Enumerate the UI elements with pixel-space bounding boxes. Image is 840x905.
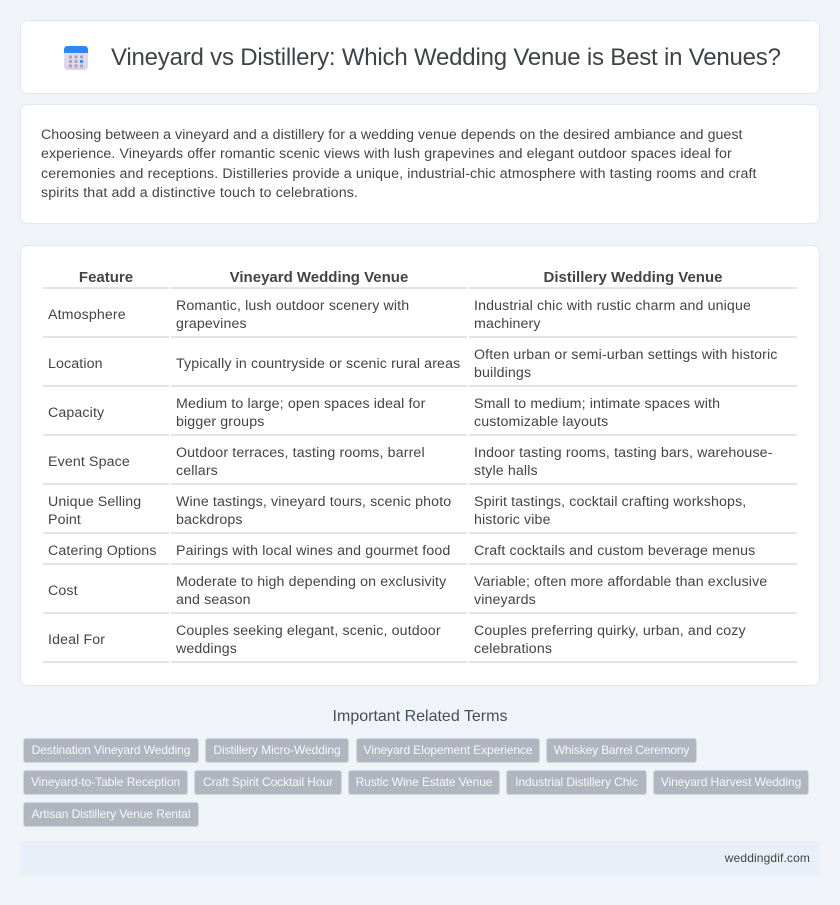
row: event space: Indoor tasting rooms, tasting bars, warehouse- [474,445,773,461]
chip: Distillery Micro-Wedding [213,743,341,757]
row: ideal for [43,623,797,663]
related terms chips [23,738,809,827]
row: catering options: Craft cocktails and custom beverage menus [474,543,755,559]
row: unique selling point: Unique Selling [48,494,141,510]
row: capacity: Small to medium; intimate spaces with [474,396,720,412]
chip: Industrial Distillery Chic [515,775,638,789]
row: atmosphere: grapevines [176,316,247,332]
footer source: weddingdif.com [725,851,810,865]
row: ideal for: celebrations [474,641,552,657]
row: unique selling point [43,494,797,534]
chip: Whiskey Barrel Ceremony [554,743,689,757]
chip [348,770,500,795]
row: cost [43,574,797,614]
chip: Vineyard Harvest Wedding [661,775,801,789]
row: cost: and season [176,592,251,608]
chip [23,738,199,763]
row: capacity [43,396,797,436]
row: event space: cellars [176,463,218,479]
row: atmosphere: machinery [474,316,541,332]
row: capacity: Medium to large; open spaces ideal for [176,396,425,412]
table header: Feature [79,269,133,286]
row: catering options: Catering Options [48,543,157,559]
row: unique selling point: Point [48,512,81,528]
row: location: Often urban or semi-urban settings with historic [474,347,778,363]
intro paragraph: ceremonies and receptions. Distilleries provide a unique, industrial-chic atmosphere with tasting rooms and craft [41,166,757,182]
row: catering options: Pairings with local wines and gourmet food [176,543,450,559]
chip [546,738,697,763]
chip [356,738,540,763]
row: unique selling point: Spirit tastings, cocktail crafting workshops, [474,494,746,510]
intro paragraph [41,127,757,201]
row: catering options [43,543,797,565]
row: event space: Event Space [48,454,130,470]
chip: Vineyard-to-Table Reception [31,775,180,789]
row: ideal for: Ideal For [48,632,105,648]
row: ideal for: Couples preferring quirky, urban, and cozy [474,623,746,639]
table header: Vineyard Wedding Venue [230,269,408,286]
row: location: Location [48,356,103,372]
chip [205,738,349,763]
comparison table card [20,245,820,686]
row: ideal for: Couples seeking elegant, scenic, outdoor [176,623,441,639]
row: location: Typically in countryside or scenic rural areas [176,356,460,372]
chip [653,770,809,795]
chip: Artisan Distillery Venue Rental [32,807,190,821]
row: unique selling point: backdrops [176,512,243,528]
row: event space: style halls [474,463,538,479]
row: cost: Moderate to high depending on exclusivity [176,574,446,590]
row: event space: Outdoor terraces, tasting rooms, barrel [176,445,425,461]
row: location: buildings [474,365,531,381]
chip: Destination Vineyard Wedding [32,743,190,757]
chip [23,770,188,795]
row: atmosphere: Romantic, lush outdoor scenery with [176,298,409,314]
row: capacity: customizable layouts [474,414,608,430]
intro text card [20,104,820,224]
row: event space [43,445,797,485]
related terms heading: Important Related Terms [333,708,507,725]
row: atmosphere: Atmosphere [48,307,126,323]
row: location [43,347,797,387]
row: cost: Variable; often more affordable than exclusive [474,574,767,590]
chip [506,770,647,795]
intro paragraph: experience. Vineyards offer romantic scenic views with lush grapevines and elegant outdoor spaces ideal for [41,146,732,162]
row: ideal for: weddings [176,641,237,657]
intro paragraph: Choosing between a vineyard and a distillery for a wedding venue depends on the desired ambiance and guest [41,127,742,143]
row: cost: vineyards [474,592,536,608]
table header: Distillery Wedding Venue [544,269,722,286]
footer bar [20,841,820,875]
chip: Craft Spirit Cocktail Hour [203,775,333,789]
chip: Vineyard Elopement Experience [364,743,532,757]
comparison table [43,269,797,663]
row: unique selling point: historic vibe [474,512,551,528]
row: unique selling point: Wine tastings, vineyard tours, scenic photo [176,494,451,510]
row: atmosphere [43,298,797,338]
row: cost: Cost [48,583,78,599]
header card [20,20,820,94]
intro paragraph: spirits that add a distinctive touch to celebrations. [41,185,358,201]
row: atmosphere: Industrial chic with rustic charm and unique [474,298,751,314]
chip: Rustic Wine Estate Venue [356,775,492,789]
title: Vineyard vs Distillery: Which Wedding Venue is Best in Venues? [111,44,781,71]
chip [194,770,342,795]
icon: calendar [64,46,88,70]
row: capacity: Capacity [48,405,104,421]
table header [43,269,797,289]
chip [23,802,199,827]
row: capacity: bigger groups [176,414,264,430]
